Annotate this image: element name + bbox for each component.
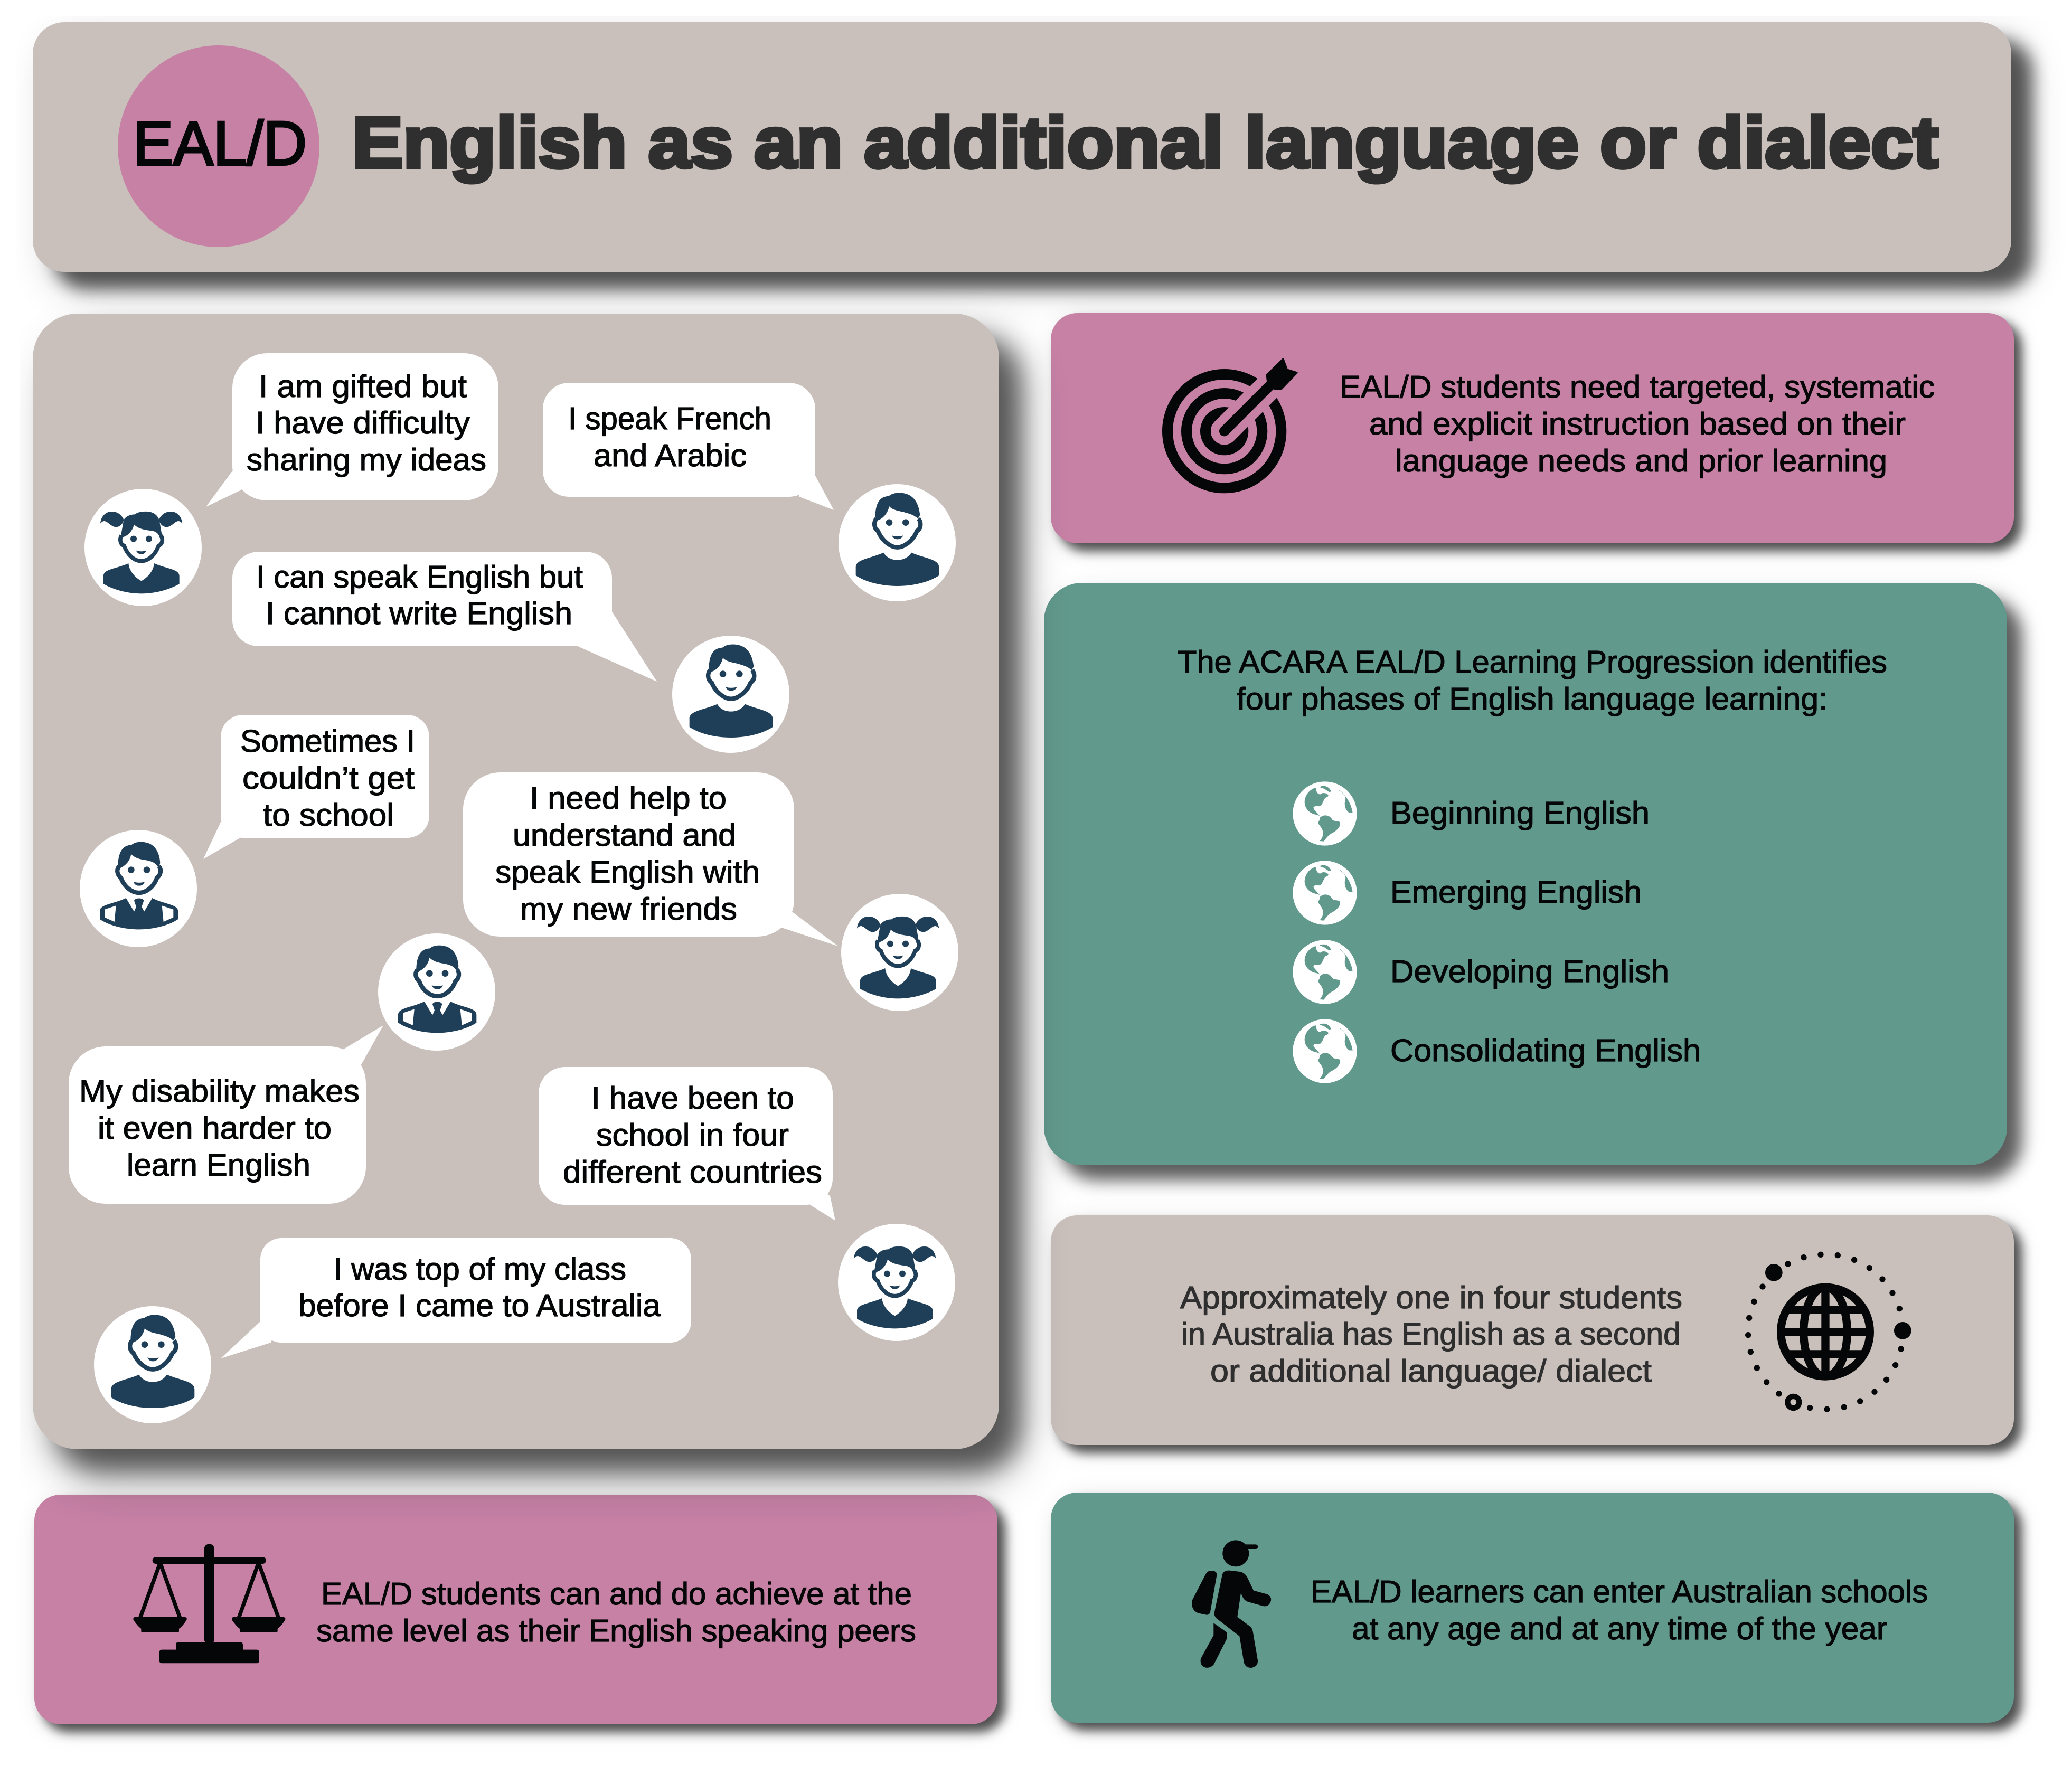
text: one in four students: Approximately one in four students: [1180, 1280, 1682, 1315]
text: can and do achieve: [316, 1576, 916, 1648]
speech bubble: gifted: sharing my ideas: [247, 442, 486, 477]
speech bubble: French and Arabic: and Arabic: [594, 438, 747, 473]
avatar: man left: [80, 830, 197, 947]
speech bubble: top of my class: I was top of my class: [334, 1252, 626, 1287]
speech bubble: French and Arabic: [543, 383, 834, 510]
speech bubble: need help: speak English with: [495, 855, 760, 890]
panel: one in four students: [1051, 1215, 2014, 1445]
avatar: boy top right: [839, 484, 956, 601]
speech bubble: four countries: school in four: [596, 1118, 789, 1153]
phase: Consolidating English: Consolidating English: [1390, 1033, 1701, 1068]
badge: EAL/D circle: EAL/D: [133, 109, 307, 178]
speech bubble: French and Arabic: I speak French: [568, 401, 771, 436]
speech bubble: need help: I need help to: [530, 781, 727, 816]
phase: Developing English: Developing English: [1390, 954, 1669, 989]
text: one in four students: in Australia has English as a second: [1181, 1317, 1681, 1352]
speech bubble: couldn't get to school: Sometimes I: [240, 724, 415, 759]
avatar: girl right: [841, 894, 958, 1011]
avatar: girl bottom right: [838, 1224, 955, 1341]
speech bubble: couldn't get to school: couldn’t get: [242, 761, 415, 796]
icon: walking student: [1192, 1540, 1271, 1668]
speech bubble: four countries: [539, 1067, 835, 1221]
speech bubble: four countries: different countries: [563, 1155, 822, 1189]
text: one in four students: [1180, 1280, 1682, 1389]
text: enter schools any time: EAL/D learners can enter Australian schools: [1311, 1574, 1928, 1609]
speech bubble: need help: [463, 772, 838, 946]
phase: Beginning English: Beginning English: [1390, 796, 1650, 830]
speech bubble: need help: my new friends: [520, 892, 737, 927]
text: progression intro: [1178, 645, 1887, 716]
panel: learning progression phases: [1044, 583, 2007, 1165]
text: enter schools any time: at any age and at any time of the year: [1352, 1611, 1887, 1646]
speech bubble: gifted: [206, 353, 498, 507]
panel: targeted instruction: [1051, 313, 2014, 543]
avatar: man centre: [378, 933, 495, 1051]
text: one in four students: or additional language/ dialect: [1210, 1354, 1652, 1389]
text: enter schools any time: [1311, 1574, 1928, 1646]
text: targeted instruction: [1340, 370, 1935, 478]
phase: Consolidating English: [1293, 1019, 1701, 1083]
text: targeted instruction: language needs and prior learning: [1395, 443, 1887, 478]
phase: Developing English: [1293, 940, 1669, 1004]
speech bubble: cannot write English: I cannot write English: [266, 596, 572, 631]
text: can and do achieve: same level as their English speaking peers: [316, 1613, 916, 1648]
speech bubble: disability: My disability makes: [79, 1074, 360, 1109]
phase: Beginning English: [1293, 781, 1650, 846]
text: progression intro: four phases of English language learning:: [1237, 682, 1828, 716]
icon: target with arrow: [1167, 359, 1297, 488]
speech bubble: gifted: I am gifted but: [259, 369, 467, 404]
panel: title banner: [33, 22, 2011, 272]
speech bubble: disability: it even harder to: [98, 1111, 332, 1146]
panel: can and do achieve: [34, 1495, 997, 1724]
phase: Emerging English: [1293, 861, 1642, 925]
text: can and do achieve: EAL/D students can and do achieve at the: [321, 1576, 912, 1611]
speech bubble: couldn't get to school: to school: [263, 798, 394, 833]
icon: globe with orbit: [1745, 1252, 1911, 1412]
title: English as an additional language or dialect: [352, 102, 1938, 183]
text: progression intro: The ACARA EAL/D Learning Progression identifies: [1178, 645, 1887, 679]
text: targeted instruction: and explicit instruction based on their: [1369, 407, 1906, 441]
badge: EAL/D circle: [118, 45, 319, 247]
speech bubble: disability: [69, 1025, 383, 1204]
speech bubble: disability: learn English: [127, 1148, 310, 1183]
icon: balance scales: [133, 1544, 285, 1663]
avatar: boy bottom left: [94, 1306, 211, 1423]
avatar: boy middle: [672, 636, 789, 753]
panel: student voices: [33, 314, 999, 1449]
speech bubble: four countries: I have been to: [591, 1081, 794, 1116]
speech bubble: couldn't get to school: [203, 715, 429, 859]
speech bubble: gifted: I have difficulty: [256, 405, 470, 440]
text: targeted instruction: EAL/D students need targeted, systematic: [1340, 370, 1935, 404]
phase: Emerging English: Emerging English: [1390, 875, 1642, 910]
speech bubble: top of my class: [221, 1238, 691, 1358]
speech bubble: cannot write English: I can speak English but: [256, 560, 583, 594]
speech bubble: cannot write English: [232, 552, 657, 682]
speech bubble: top of my class: before I came to Australia: [298, 1288, 661, 1323]
speech bubble: need help: understand and: [513, 818, 736, 853]
avatar: girl top left: [84, 489, 202, 606]
panel: enter schools any time: [1051, 1493, 2014, 1723]
